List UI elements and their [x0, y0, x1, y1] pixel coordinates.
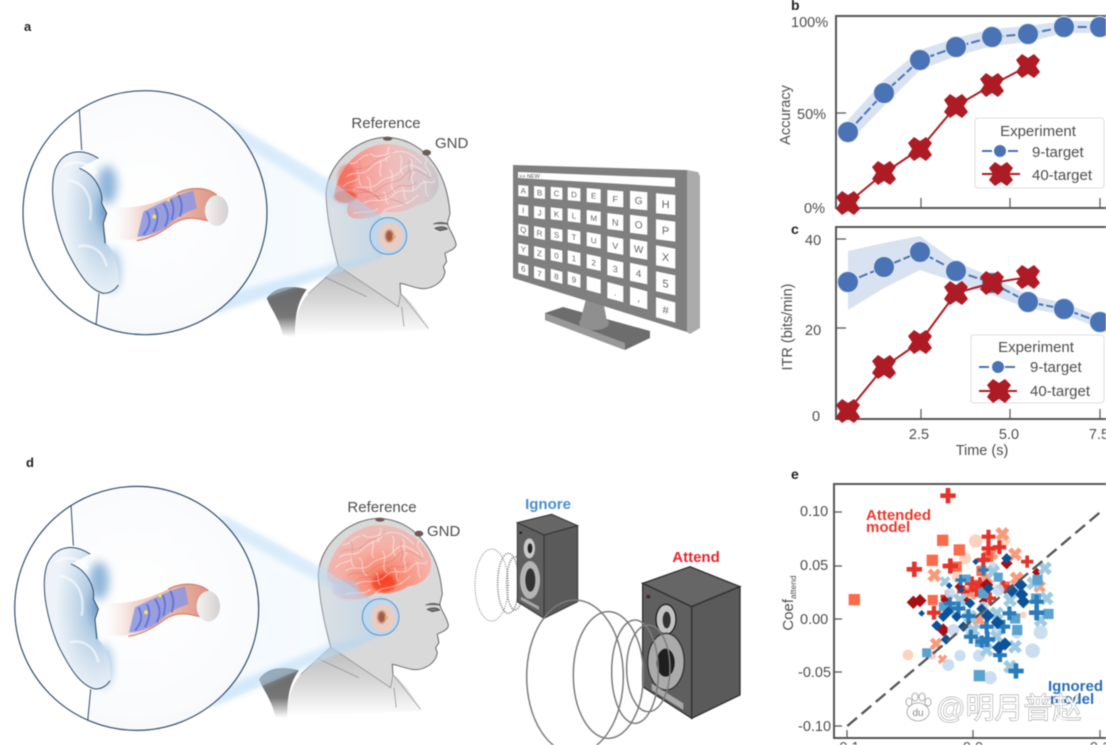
- 40-target series: [836, 54, 1040, 215]
- key grid: L: [572, 211, 577, 221]
- legend b: [975, 118, 1104, 188]
- key grid: 2: [591, 258, 596, 268]
- key grid: M: [590, 213, 597, 223]
- legend b: 9-target: [1032, 144, 1085, 161]
- icon: paw: du: [912, 708, 924, 719]
- icon: chair: [259, 668, 299, 718]
- label: Ignore: Ignore: [525, 496, 571, 513]
- label: Attended model: model: [866, 519, 910, 536]
- legend c: 9-target: [1030, 359, 1083, 376]
- key grid: H: [662, 199, 670, 211]
- attended speaker: [643, 567, 740, 718]
- chart e: coefficient scatter: [780, 484, 1106, 745]
- icon: chair: [267, 287, 307, 337]
- panel label e: e: [791, 466, 799, 482]
- key grid: V: [612, 240, 618, 251]
- light-blue magnification cone, panel a: [213, 120, 383, 315]
- axes: [836, 16, 1106, 208]
- small in-ear circle, panel d: [362, 599, 399, 635]
- brain with left activation: [334, 144, 439, 219]
- y tick labels: 100%: [791, 15, 828, 31]
- key grid: Z: [537, 249, 542, 259]
- person silhouette: [287, 518, 448, 716]
- y tick labels: 0.10: [800, 504, 828, 520]
- key grid: F: [613, 194, 619, 204]
- 40-target series: [836, 265, 1040, 423]
- watermark: [906, 692, 1081, 725]
- label: GND: GND: [435, 135, 468, 152]
- key grid: ,: [637, 293, 640, 305]
- monitor with letter grid: [513, 165, 700, 350]
- key grid: O: [635, 220, 643, 232]
- legend c: Experiment: [998, 339, 1075, 356]
- key grid: 6: [521, 264, 526, 274]
- x axis title: Time (s): [956, 443, 1008, 459]
- ignored speaker: [517, 514, 578, 618]
- key grid: [518, 185, 675, 322]
- label: Ignored model: model: [1050, 691, 1094, 708]
- y tick labels: -0.10: [798, 719, 831, 735]
- panel d: seated person with EEG: [259, 518, 448, 718]
- magnified ear circle, panel a: [23, 91, 267, 335]
- y tick labels: 40: [805, 233, 821, 249]
- key grid: T: [572, 233, 577, 242]
- speakers and sound waves: [475, 514, 740, 745]
- attended (red) markers: [849, 488, 1046, 664]
- panel label d: d: [26, 455, 34, 470]
- key grid: .: [614, 287, 617, 298]
- key grid: P: [662, 225, 669, 238]
- y tick labels: 0%: [804, 201, 825, 217]
- key grid: X: [662, 251, 670, 265]
- panel a: seated person with EEG: [267, 137, 456, 337]
- small in-ear circle, panel a: [370, 218, 407, 254]
- key grid: 5: [663, 278, 669, 291]
- axes: [834, 484, 1106, 738]
- x tick labels: 5.0: [999, 427, 1019, 443]
- key grid: N: [612, 217, 619, 228]
- dotted sound waves from ignored speaker: [475, 549, 523, 621]
- chart c: ITR over time: [780, 227, 1106, 459]
- key grid: 0: [554, 251, 559, 261]
- diagonal dashed line: [847, 512, 1100, 726]
- x tick labels: [909, 427, 1106, 443]
- label: Attend: Attend: [672, 549, 720, 566]
- brain with temporal activation: [327, 525, 431, 600]
- solid sound waves to attended speaker: [527, 600, 670, 745]
- confidence band, 9-target: [848, 236, 1106, 330]
- y tick labels: 50%: [797, 107, 826, 123]
- key grid: 4: [636, 269, 642, 281]
- 9-target series: [838, 16, 1106, 142]
- key grid: A: [521, 186, 527, 196]
- key grid: #: [663, 304, 669, 318]
- monitor stand: [545, 295, 650, 350]
- key grid: K: [554, 210, 560, 219]
- x tick labels (cropped): [834, 740, 1106, 745]
- key grid: S: [554, 230, 559, 240]
- y axis title: Accuracy: [778, 84, 794, 145]
- label: Ignored model: Ignored: [1048, 678, 1103, 695]
- y tick labels: 20: [805, 323, 821, 339]
- ignored (blue) markers: [847, 512, 1100, 726]
- y tick labels: 0.05: [800, 558, 828, 574]
- y tick labels: [791, 15, 828, 217]
- label: GND: GND: [427, 523, 460, 540]
- key grid: Y: [521, 245, 527, 255]
- key grid: U: [591, 236, 597, 246]
- key grid: W: [634, 244, 644, 257]
- key grid: D: [571, 190, 577, 200]
- magnified ear circle, panel d: [15, 486, 259, 730]
- label: Reference: Reference: [347, 499, 417, 516]
- key grid: 1: [572, 254, 577, 264]
- key grid: Q: [520, 225, 526, 235]
- key grid: 3: [613, 264, 618, 275]
- y tick labels: [798, 504, 831, 735]
- y axis title: ITR (bits/min): [780, 284, 796, 370]
- key grid: 9: [572, 275, 577, 285]
- key grid: E: [591, 191, 596, 201]
- legend c: 40-target: [1030, 383, 1091, 400]
- person silhouette: [295, 137, 456, 335]
- key grid: B: [537, 188, 542, 198]
- key grid: 8: [554, 272, 559, 282]
- key grid: 7: [537, 269, 542, 279]
- legend c: [971, 335, 1104, 403]
- monitor screen: [513, 165, 687, 332]
- icon: paw: [906, 693, 931, 721]
- x tick labels: 2.5: [909, 427, 929, 443]
- monitor side bezel: [687, 170, 700, 334]
- legend b: Experiment: [1000, 123, 1077, 140]
- key grid: I: [522, 206, 524, 215]
- legend b: 40-target: [1032, 167, 1093, 184]
- key grid: C: [554, 189, 560, 198]
- text bar: >> NEW: [519, 174, 541, 180]
- panel label a: a: [24, 19, 32, 34]
- text bar: [518, 172, 675, 187]
- y tick labels: 0.00: [800, 612, 828, 628]
- light-blue magnification cone, panel d: [210, 513, 377, 708]
- y tick labels: -0.05: [798, 665, 831, 681]
- chart b: accuracy over time: [778, 15, 1106, 217]
- y axis title: attend: [788, 575, 798, 599]
- key grid: J: [537, 208, 542, 218]
- panel c heading: c: [791, 221, 799, 237]
- key grid: G: [635, 196, 643, 207]
- confidence band, 9-target: [848, 21, 1106, 143]
- y tick labels: [805, 233, 821, 425]
- watermark text: @明月普赵: [936, 692, 1081, 725]
- 9-target series: [838, 242, 1106, 332]
- label: Attended model: Attended: [866, 507, 931, 524]
- key grid: R: [537, 229, 543, 238]
- y tick labels: 0: [812, 409, 820, 425]
- axes: [836, 227, 1106, 419]
- label: Reference: Reference: [351, 115, 421, 132]
- y axis title: Coef: [780, 599, 797, 631]
